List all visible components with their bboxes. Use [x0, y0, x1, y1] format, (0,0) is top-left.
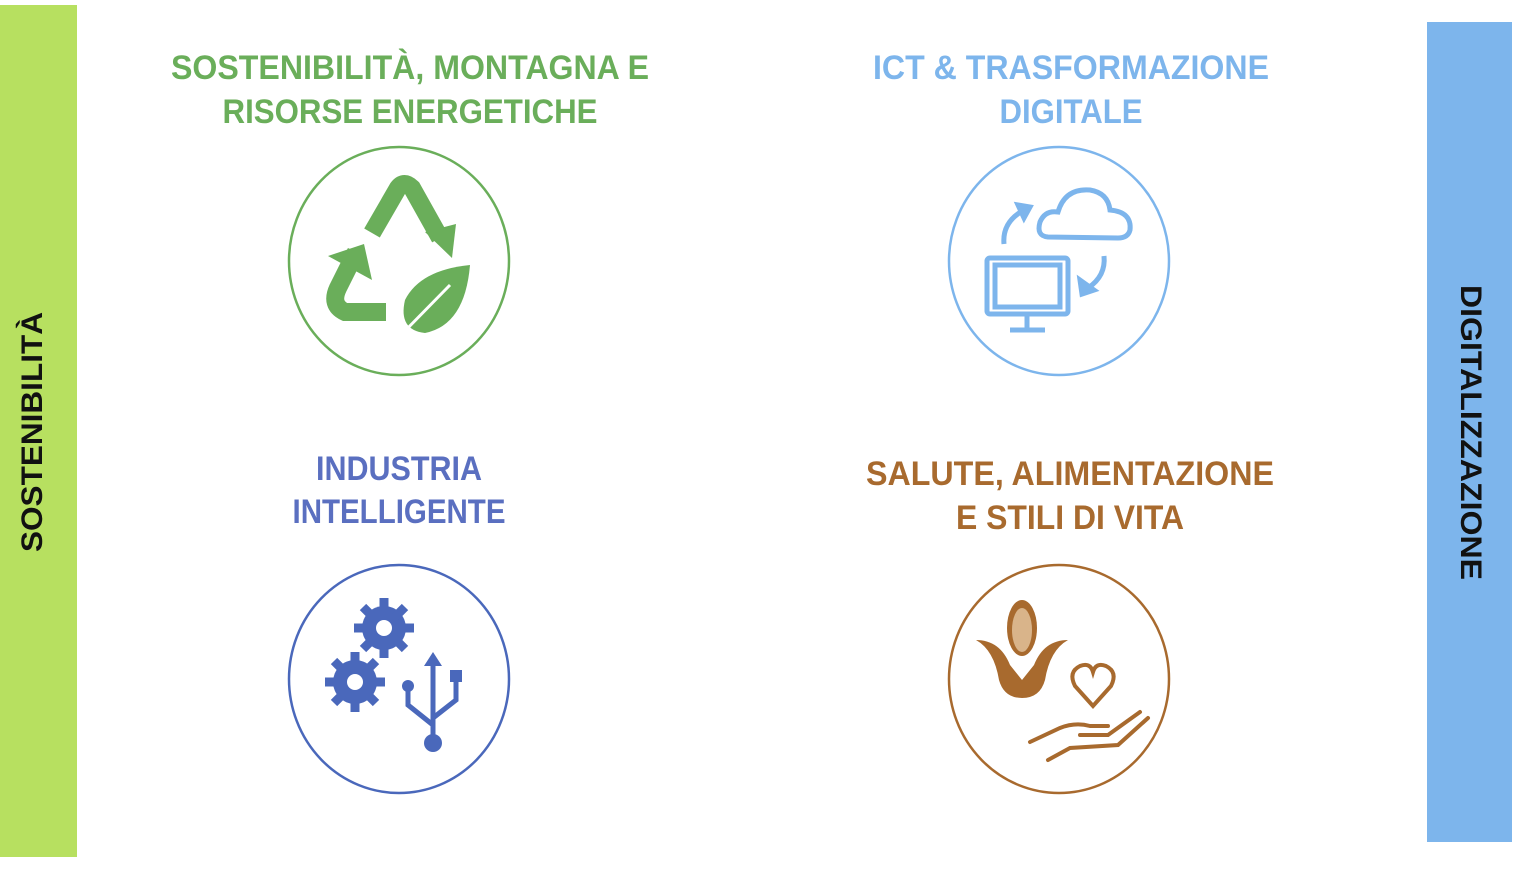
heading: ICT: ICT & TRASFORMAZIONE: [873, 49, 1269, 87]
icon: gears usb: [289, 565, 509, 793]
heading: salute: [866, 455, 1274, 537]
icon: corn heart hand: [949, 565, 1169, 793]
heading: ICT: [873, 49, 1269, 131]
left bar: sostenibilità: SOSTENIBILITÀ: [15, 312, 49, 552]
heading: sostenibilità montagna: SOSTENIBILITÀ, MONTAGNA E: [171, 49, 649, 87]
heading: salute: E STILI DI VITA: [956, 499, 1184, 537]
heading: industria: [292, 450, 506, 531]
icon: recycle leaf: [289, 147, 509, 375]
right bar: digitalizzazione: DIGITALIZZAZIONE: [1454, 285, 1487, 580]
heading: industria: INTELLIGENTE: [292, 493, 506, 531]
right bar: digitalizzazione: [1427, 22, 1512, 842]
icon: cloud computer: [949, 147, 1169, 375]
heading: sostenibilità montagna: RISORSE ENERGETICHE: [222, 93, 598, 131]
heading: sostenibilità montagna: [171, 49, 649, 131]
heading: ICT: DIGITALE: [1000, 93, 1142, 131]
heading: salute: SALUTE, ALIMENTAZIONE: [866, 455, 1274, 493]
heading: industria: INDUSTRIA: [316, 450, 482, 488]
left bar: sostenibilità: [0, 5, 77, 857]
